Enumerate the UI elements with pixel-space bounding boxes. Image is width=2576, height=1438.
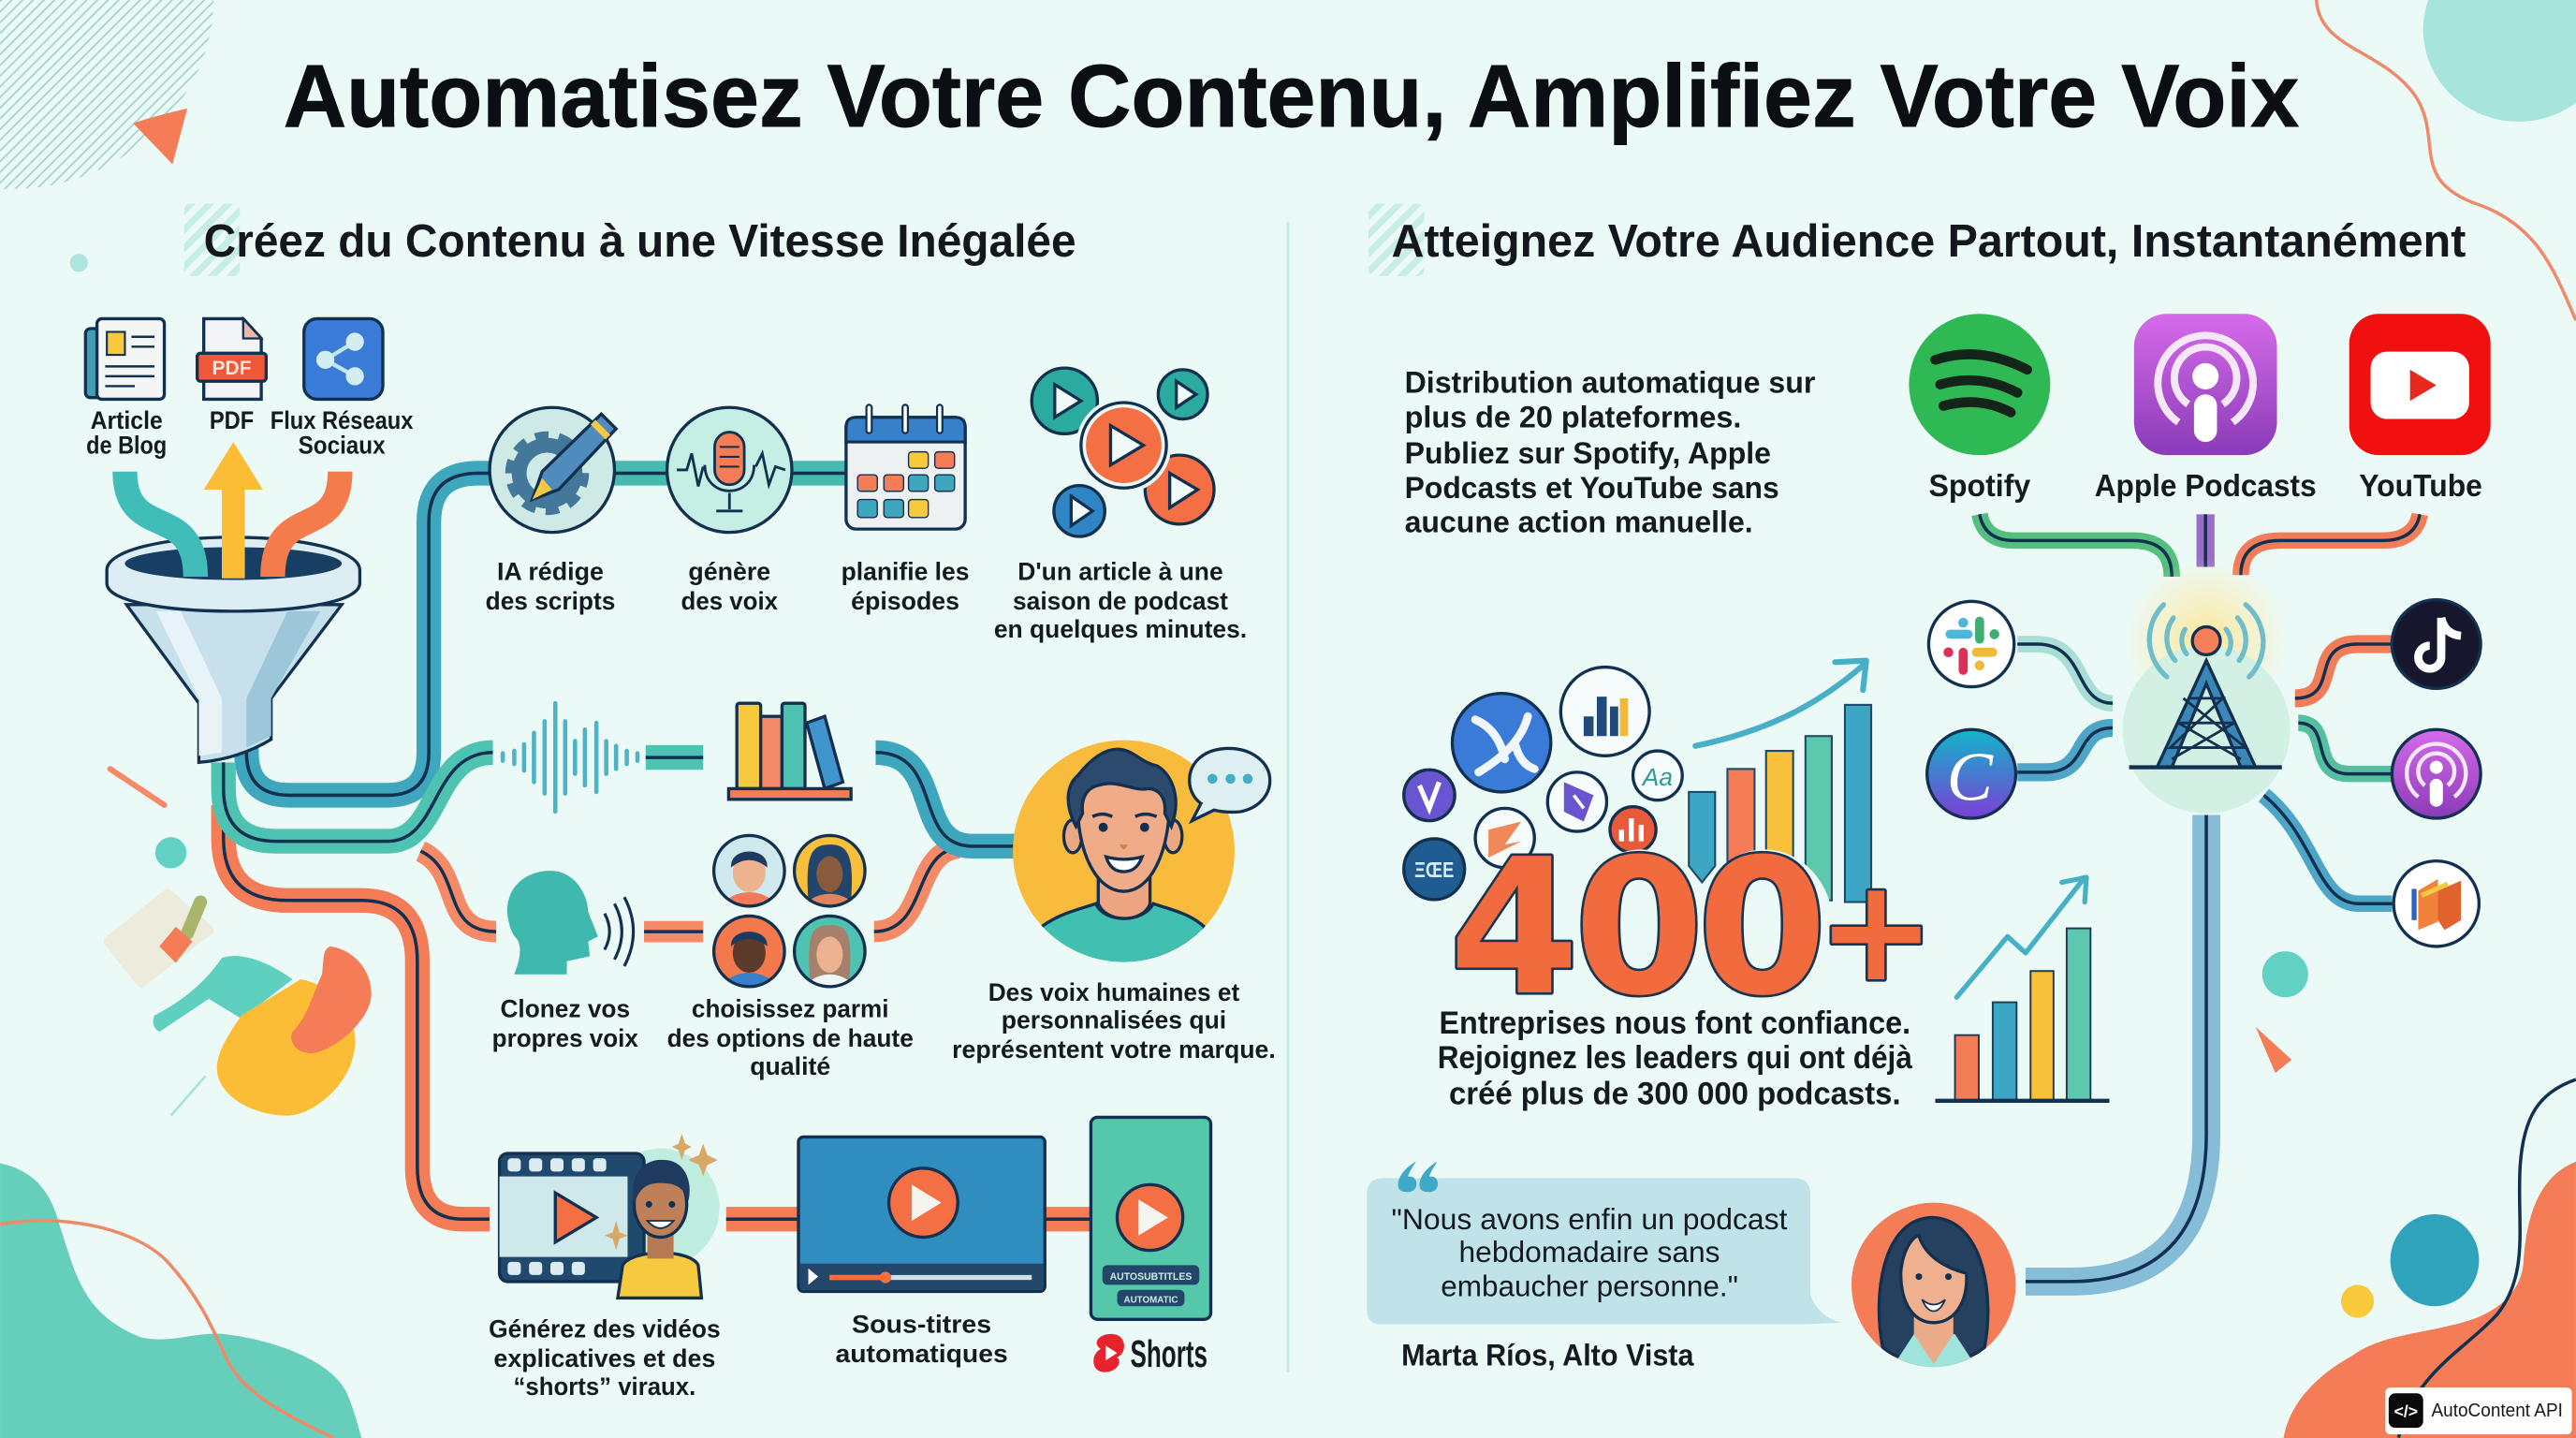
text: trust statement: créé plus de 300 000 podcasts. [1449,1076,1901,1111]
label: clone: propres voix [492,1023,638,1052]
icon: phone with captions: AUTOMATIC [1123,1295,1178,1306]
left heading: Créez du Contenu à une Vitesse Inégalée [204,216,1076,267]
logo: YouTube Shorts: Shorts [1131,1332,1208,1375]
text: trust statement: Rejoignez les leaders qui ont déjà [1438,1040,1913,1076]
label: voices: des voix [681,586,778,615]
pipe: Canva to tower [2017,727,2113,772]
label: subtitles [835,1309,1008,1368]
label: subtitles: Sous-titres [852,1309,991,1338]
chart: small growth bars [1935,877,2110,1101]
icon: speaking head [507,871,634,975]
source: social feeds: Flux Réseaux [271,405,413,434]
column divider [1287,222,1289,1372]
icon: waveform [503,703,637,812]
text: distribution description: Publiez sur Spotify, Apple [1405,436,1771,470]
logo: Spotify [1909,314,2050,504]
text: distribution description [1405,365,1816,539]
icon: voice avatars [711,833,867,989]
label: season: en quelques minutes. [994,614,1247,643]
decoration: bottom-left blob [0,1164,361,1438]
text: distribution description: plus de 20 plateformes. [1405,400,1741,433]
decoration: top-right blob and curve [2317,0,2576,320]
icon: phone with captions: AUTOSUBTITLES [1110,1271,1193,1283]
decoration: left abstract shapes [109,769,372,1116]
source: blog article: Article [91,405,163,434]
icon: play bubbles [1032,368,1214,536]
icon: broadcast tower [2123,559,2291,814]
decoration: bottom-right blob [2256,951,2576,1438]
text: distribution description: aucune action manuelle. [1405,506,1753,539]
logo cluster: customers: Aa [1641,763,1673,791]
label: voices: génère [688,557,770,586]
icon: microphone [667,407,792,533]
decoration: top-left hatching and triangle [0,0,213,271]
pipe: TikTok to tower [2295,644,2392,698]
label: choose voices: qualité [750,1051,830,1080]
title: Automatisez Votre Contenu, Amplifiez Votre Voix [284,47,2300,146]
label: choose voices: des options de haute [667,1023,914,1052]
logo: Apple Podcasts: Apple Podcasts [2095,469,2317,504]
pipe: teal from library to avatar [875,753,1016,846]
label: choose voices [667,993,914,1080]
icon: video player [798,1137,1045,1291]
logo: YouTube Shorts [1093,1332,1208,1375]
label: choose voices: choisissez parmi [692,993,889,1022]
pipe: YouTube to tower [2241,514,2420,575]
testimonial author: Marta Ríos, Alto Vista [1401,1338,1694,1372]
label: human voices: personnalisées qui [1002,1005,1226,1034]
label: scripts: des scripts [486,586,615,615]
pipe: Apple Podcasts to tower [2201,514,2211,566]
icon: phone with captions [1090,1117,1211,1319]
label: scripts: IA rédige [497,557,604,586]
label: subtitles: automatiques [835,1339,1008,1368]
icon: calendar [846,407,965,529]
logo cluster: customers [1404,668,1682,900]
label: human voices [952,977,1276,1064]
logo: Apple Podcasts [2095,314,2317,504]
label: clone [492,993,638,1052]
label: human voices: représentent votre marque. [952,1034,1276,1064]
label: voices [681,557,778,615]
label: episodes: planifie les [842,557,970,586]
icon: film and presenter [500,1134,720,1298]
logo: Canva: C [1947,739,1994,815]
pipe: podcast to tower [2298,723,2392,774]
badge: AutoContent API: AutoContent API [2431,1401,2563,1421]
logo: YouTube: YouTube [2359,469,2482,504]
left heading [184,204,1076,276]
badge: AutoContent API [2385,1387,2572,1434]
pipe: orange from voices to avatar [874,848,959,932]
pipe: orange clone branch [420,851,703,932]
chart: growth bars behind number [1689,661,1871,902]
source: blog article: de Blog [86,430,167,459]
testimonial bubble: embaucher personne." [1441,1269,1738,1303]
source: blog article [85,318,167,459]
number: 400+: 400 [1449,819,1827,1037]
label: explainer videos: Générez des vidéos [489,1314,721,1343]
label: episodes: épisodes [851,586,959,615]
icon: smiling man avatar [1013,741,1235,969]
right heading [1368,204,2466,276]
source: PDF [198,318,266,434]
logo: Slack [1928,601,2014,687]
label: clone: Clonez vos [500,993,630,1022]
logo cluster: customers: ΞŒΕ [1414,858,1454,882]
badge: AutoContent API: </> [2394,1402,2418,1421]
label: scripts [486,557,615,615]
icon: voice library books [728,703,851,800]
logo: YouTube [2349,314,2491,504]
logo: Canva [1927,729,2015,818]
pipe: orange to video row [224,805,490,1219]
pipe: teal between script, voice and calendar [607,466,871,480]
logo: TikTok [2392,600,2481,688]
label: season: saison de podcast [1013,586,1228,615]
text: distribution description: Distribution automatique sur [1405,365,1816,399]
source: PDF: PDF [210,405,254,434]
pipe: tower to testimonial [2026,814,2206,1282]
label: season [994,557,1247,643]
label: explainer videos: “shorts” viraux. [514,1372,695,1401]
pipe: blue to script step [246,473,493,795]
pipe: orange between film and player [726,1212,798,1226]
right heading: Atteignez Votre Audience Partout, Instantanément [1392,216,2466,267]
pipe: teal shelf segment [646,751,703,765]
label: explainer videos [489,1314,721,1401]
pipe: Slack to tower [2017,644,2113,703]
logo: Spotify: Spotify [1928,469,2031,504]
label: season: D'un article à une [1017,557,1223,586]
logo: books app [2393,861,2479,946]
avatar: Marta [1852,1203,2015,1372]
text: distribution description: Podcasts et YouTube sans [1405,471,1779,505]
pipe: orange between player and phone [1045,1212,1090,1226]
pipe: teal to voice row [224,753,493,842]
funnel with input streams [107,442,359,762]
label: explainer videos: explicatives et des [493,1343,715,1372]
pipe: Spotify to tower [1980,514,2172,577]
number: 400+: + [1817,848,1936,1013]
source: PDF: PDF [212,358,252,379]
testimonial bubble: hebdomadaire sans [1459,1235,1720,1269]
label: episodes [842,557,970,615]
pipe: books app to tower [2263,795,2392,903]
text: trust statement: Entreprises nous font confiance. [1439,1005,1910,1041]
icon: speech bubble [1190,748,1270,821]
testimonial bubble: "Nous avons enfin un podcast [1392,1202,1788,1236]
icon: gear and pencil [490,407,616,533]
text: trust statement [1438,1005,1913,1111]
label: human voices: Des voix humaines et [988,977,1239,1006]
source: social feeds: Sociaux [299,430,386,459]
testimonial bubble [1367,1162,1841,1325]
source: social feeds [271,318,413,459]
logo: podcast [2392,729,2481,818]
